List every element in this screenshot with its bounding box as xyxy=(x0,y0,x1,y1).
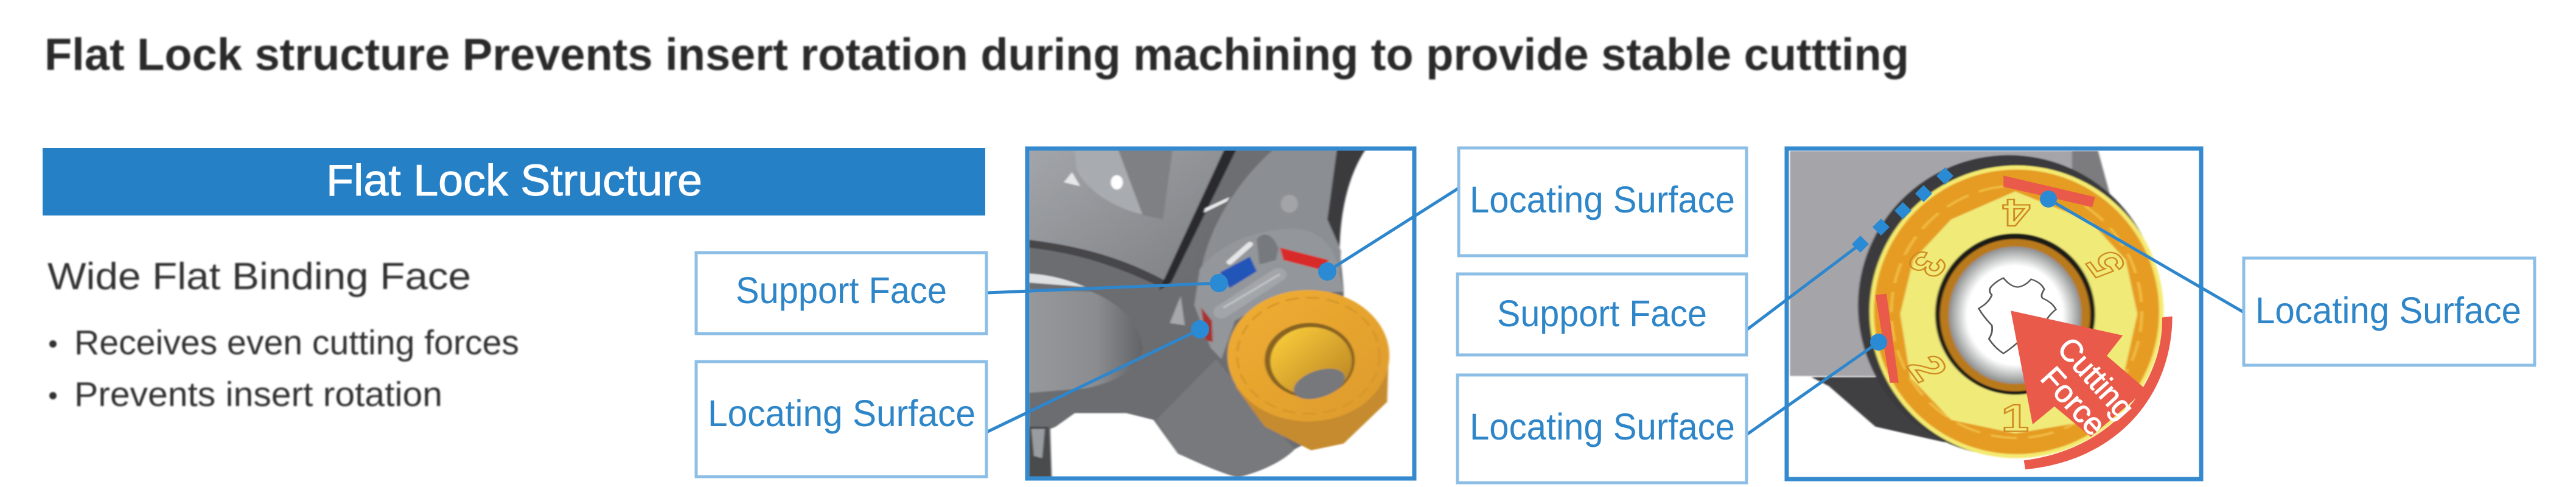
leader lines xyxy=(986,188,2244,435)
panel: holder and insert 3D view xyxy=(1027,149,1414,478)
text block: wide flat binding face xyxy=(47,256,519,414)
label: support face (left): Support Face xyxy=(736,270,947,311)
panel: insert front view xyxy=(1787,149,2201,479)
subheading: Wide Flat Binding Face xyxy=(47,256,471,298)
label: support face (middle) xyxy=(1457,274,1747,355)
illustration: insert with cutting force xyxy=(1790,151,2173,469)
insert index numbers: 1 xyxy=(2002,397,2029,440)
label: support face (left) xyxy=(696,253,986,334)
label: locating surface (middle bottom): Locating Surface xyxy=(1470,406,1735,447)
label: locating surface (middle top) xyxy=(1459,148,1747,256)
insert index numbers xyxy=(1896,191,2137,440)
title: Flat Lock structure Prevents insert rotation during machining to provide stable cuttting xyxy=(44,29,1909,80)
label: locating surface (middle bottom) xyxy=(1457,375,1747,483)
insert index numbers: 4 xyxy=(2002,191,2030,234)
label: locating surface (left) xyxy=(696,362,986,477)
illustration: tool holder with insert xyxy=(1028,150,1389,477)
label: support face (middle): Support Face xyxy=(1497,293,1707,334)
heading text: Flat Lock Structure xyxy=(326,156,702,205)
red contact strips xyxy=(1876,175,2095,383)
insert index numbers: 5 xyxy=(2075,244,2137,284)
insert index numbers: 3 xyxy=(1896,244,1958,284)
marker dots xyxy=(1191,167,2057,351)
arrow: cutting force xyxy=(2011,310,2146,437)
frame xyxy=(1787,149,2201,479)
cutting force label: Force xyxy=(2034,360,2113,443)
label: locating surface (middle top): Locating Surface xyxy=(1470,179,1735,220)
frame xyxy=(1027,149,1414,478)
panel: flat lock structure heading bar xyxy=(43,148,985,215)
label: locating surface (left): Locating Surface xyxy=(708,393,976,434)
cutting force label: Cutting xyxy=(2050,331,2141,426)
insert index numbers: 2 xyxy=(1896,349,1958,388)
bullet two: Prevents insert rotation xyxy=(74,375,442,414)
bullet one: Receives even cutting forces xyxy=(74,323,519,362)
label: locating surface (right): Locating Surface xyxy=(2255,290,2521,331)
label: locating surface (right) xyxy=(2244,258,2535,365)
arc: cutting force sweep xyxy=(2024,317,2173,469)
icon: torx socket xyxy=(1979,278,2056,354)
